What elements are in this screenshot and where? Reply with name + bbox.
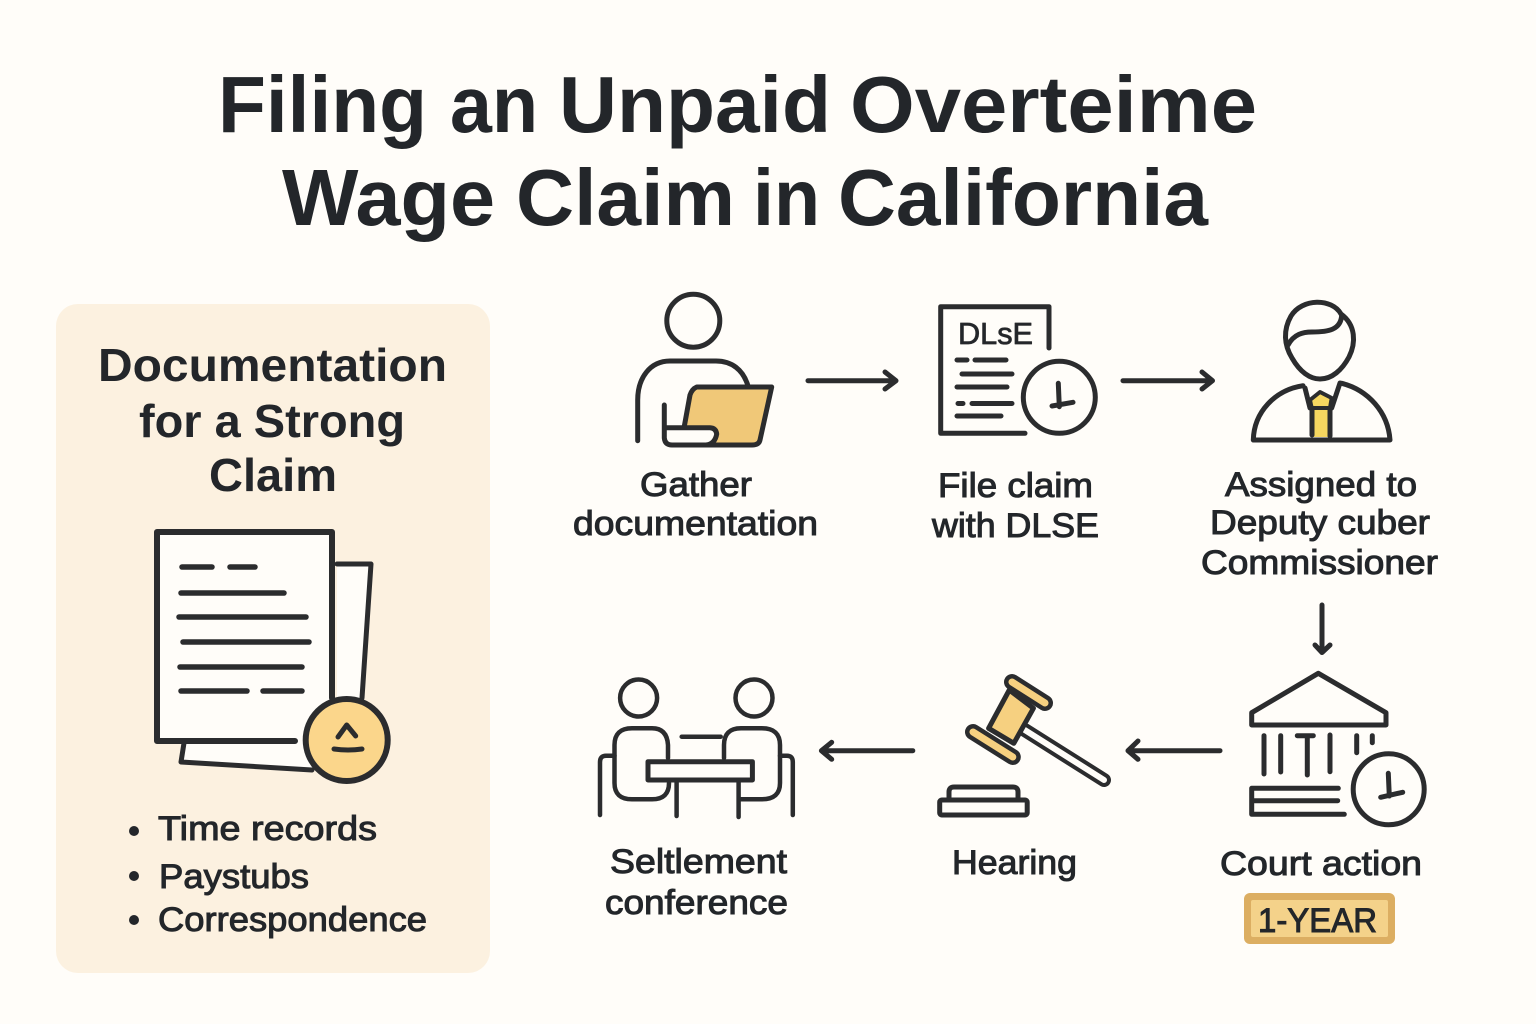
icon: courthouse with clock [1252,673,1424,825]
badge: 1-year [1244,893,1395,944]
step: file claim [931,307,1099,545]
label: Court action [1220,845,1422,883]
title: an [450,60,538,149]
title: Unpaid [559,60,831,149]
panel heading: for a Strong [139,395,405,447]
arrow [808,372,896,389]
arrow [1315,605,1330,652]
bullet list: Paystubs [159,858,309,896]
title: California [838,153,1209,242]
icon: commissioner with tie [1253,302,1390,440]
title: Overteime [850,60,1257,149]
label [931,467,1099,545]
title: Claim [516,153,735,242]
icon: DLSE form with clock: DLsE [958,316,1033,351]
title: Filing [218,60,427,149]
badge: 1-year: 1-YEAR [1258,902,1377,940]
title: in [753,153,820,242]
bullet list [129,810,427,939]
label [573,466,818,543]
arrow [1128,741,1220,759]
icon: gavel [940,682,1104,815]
panel heading [98,339,447,501]
bullet list: Correspondence [158,901,427,939]
icon: person with laptop [638,294,772,445]
icon: documents with badge [157,532,388,781]
label: with DLSE [931,507,1099,545]
label [605,843,788,922]
label: conference [605,884,788,922]
icon: DLSE form with clock [941,307,1095,433]
step: hearing [940,682,1104,882]
arrow [1123,372,1212,389]
label: Deputy cuber [1210,504,1430,542]
label: Seltlement [610,843,788,881]
label [1201,466,1438,582]
label: Assigned to [1225,466,1417,504]
label: File claim [938,467,1093,505]
label: documentation [573,505,818,543]
title [218,60,1257,242]
title: Wage [282,153,495,242]
bullet list: Time records [158,810,377,848]
step: settlement conference [600,680,793,922]
icon: two people at table [600,680,793,817]
panel heading: Documentation [98,339,447,391]
step: gather documentation [573,294,818,543]
label: Commissioner [1201,544,1438,582]
step: court action [1220,673,1424,883]
panel: documentation [56,304,490,973]
arrow [821,742,913,759]
label: Gather [640,466,752,504]
step: assigned to deputy [1201,302,1438,582]
label: Hearing [952,844,1077,882]
panel heading: Claim [209,449,337,501]
